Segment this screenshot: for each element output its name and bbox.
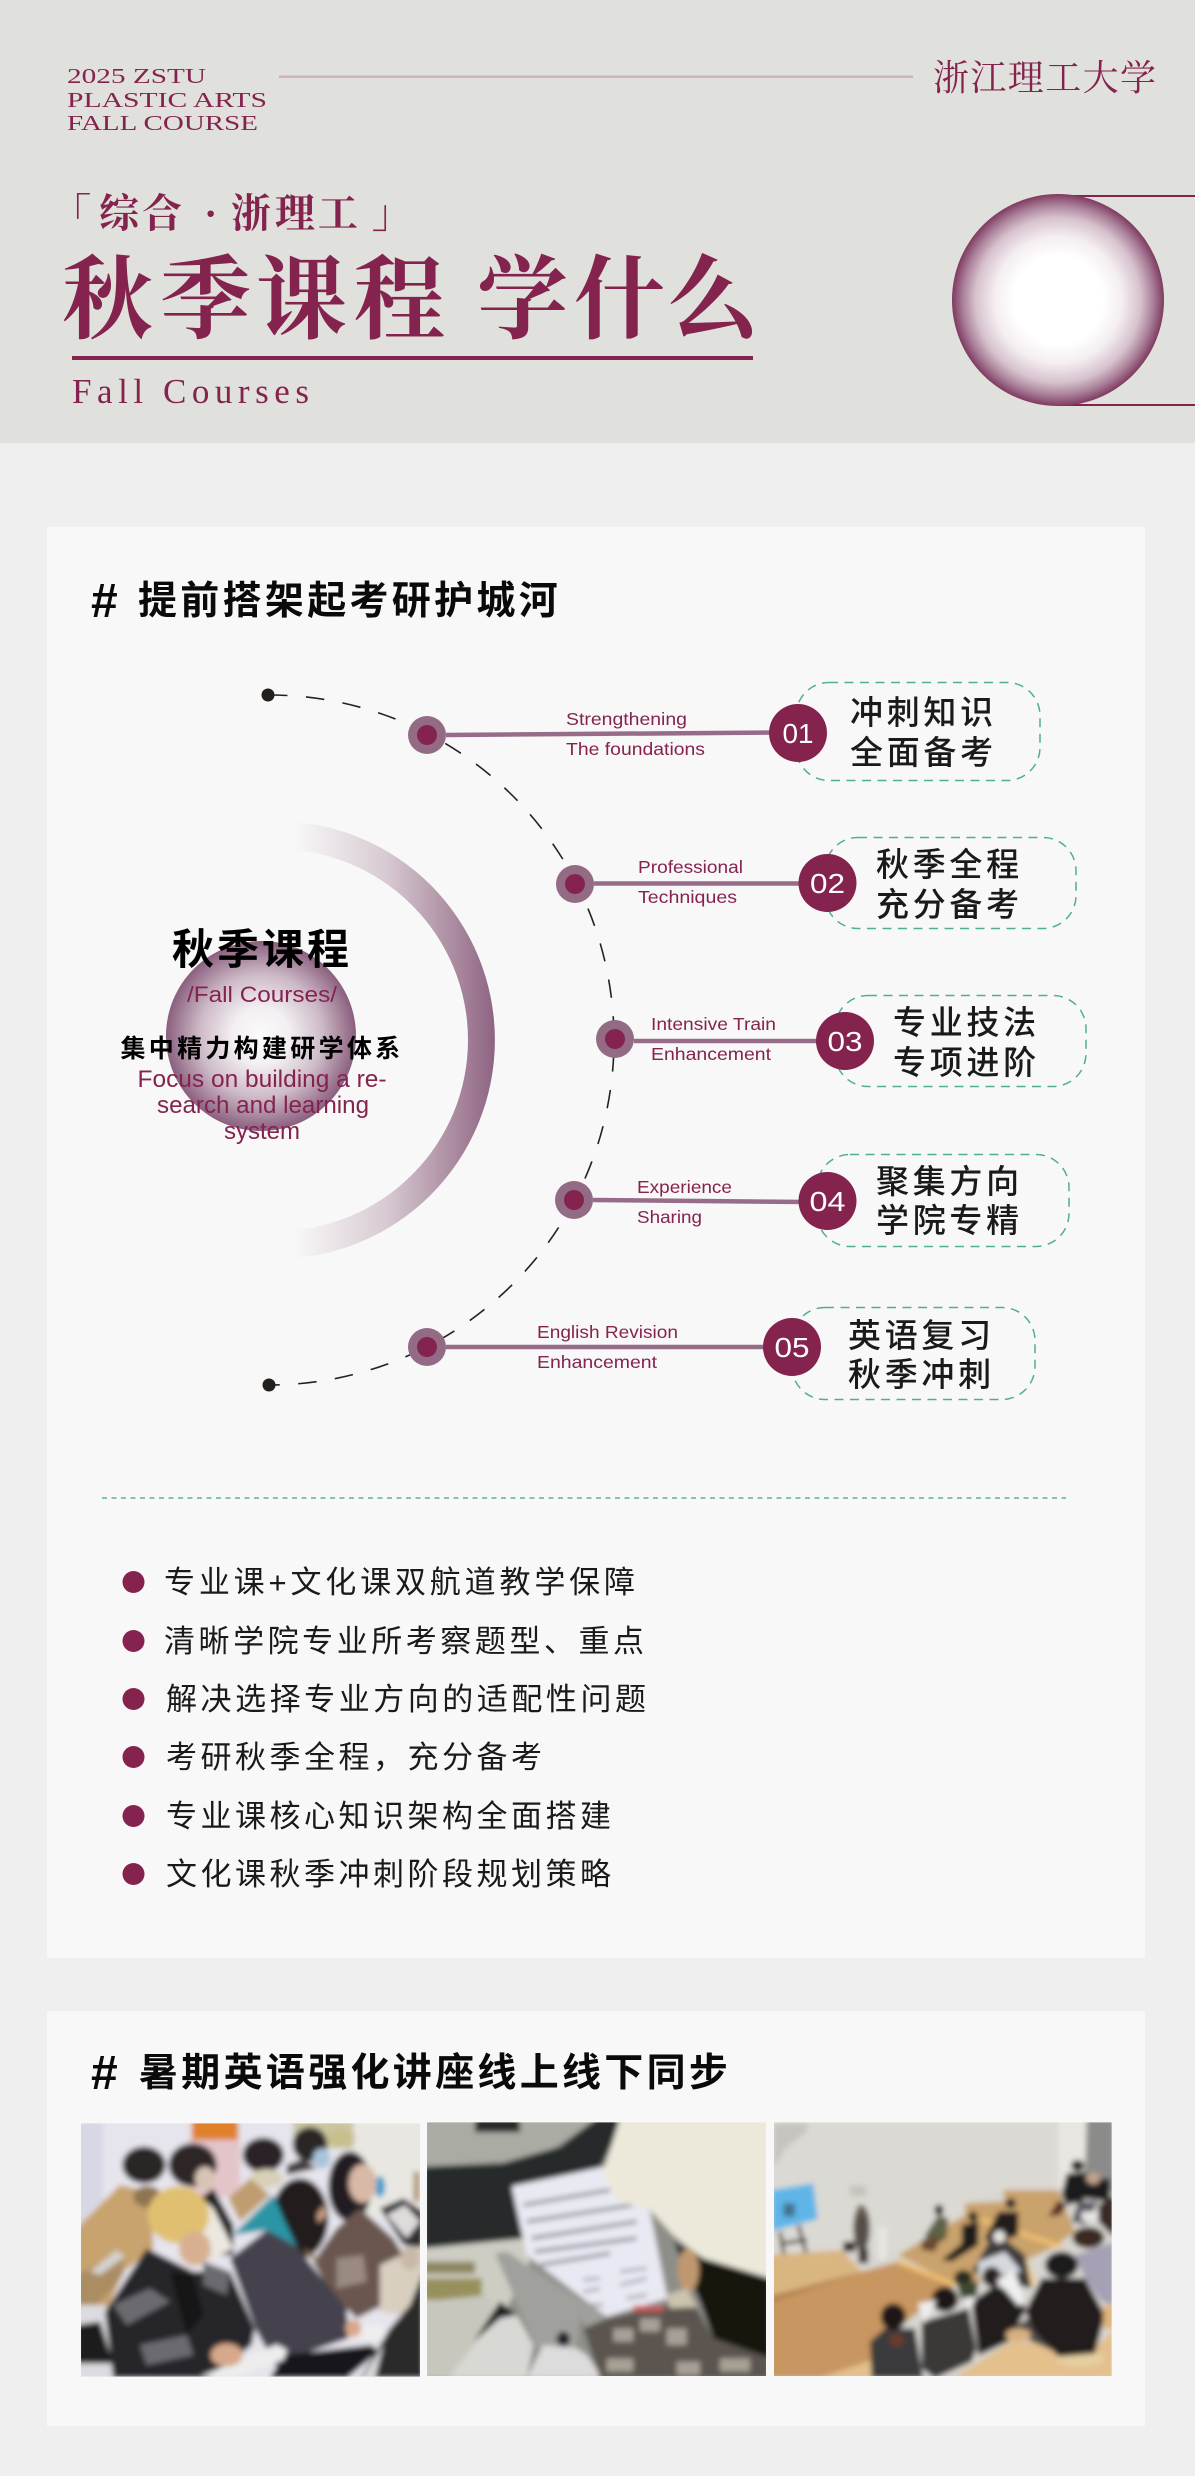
- item 3: Enhancement: [651, 1044, 771, 1064]
- item 4: [555, 1154, 1069, 1246]
- item 5: 英语复习: [848, 1317, 995, 1354]
- subtitle: 「综合·浙理工」: [51, 191, 412, 236]
- item 3: 专项进阶: [893, 1044, 1040, 1081]
- centre text: 秋季课程: [172, 926, 352, 973]
- item 1: The foundations: [566, 739, 705, 759]
- section heading: #: [91, 2047, 118, 2100]
- section heading: 提前搭架起考研护城河: [138, 580, 561, 623]
- bullet list: 专业课核心知识架构全面搭建: [166, 1799, 611, 1834]
- bullet list: 文化课秋季冲刺阶段规划策略: [166, 1857, 611, 1892]
- gradient half ring: [276, 821, 495, 1259]
- item 2: 充分备考: [876, 886, 1023, 923]
- english eyebrow text: 2025 ZSTU: [67, 64, 206, 88]
- header rule: [279, 76, 913, 78]
- item 4: 聚集方向: [876, 1163, 1023, 1200]
- main title: 秋季课程学什么: [62, 250, 763, 351]
- section heading: #: [91, 575, 118, 628]
- item 3: 03: [828, 1026, 862, 1057]
- item 4: 学院专精: [876, 1202, 1023, 1239]
- panel: English lectures: [47, 2011, 1145, 2426]
- item 3: [596, 996, 1086, 1086]
- item 1: 冲刺知识: [850, 694, 997, 731]
- english title: Fall Courses: [72, 372, 309, 411]
- gradient sphere with lines: [952, 194, 1195, 406]
- item 1: 01: [782, 718, 814, 749]
- item 3: Intensive Train: [651, 1014, 776, 1034]
- english eyebrow text: FALL COURSE: [67, 111, 258, 135]
- university name: 浙江理工大学: [933, 58, 1156, 98]
- item 5: 05: [774, 1332, 810, 1363]
- centre text: [120, 926, 404, 1145]
- centre text: search and learning: [157, 1092, 369, 1119]
- english eyebrow text: PLASTIC ARTS: [67, 88, 267, 112]
- arc end dots: [262, 688, 276, 1392]
- item 4: Sharing: [637, 1207, 702, 1227]
- item 2: 02: [810, 868, 845, 899]
- panel: course outline: [47, 527, 1145, 1958]
- item 5: 秋季冲刺: [848, 1356, 995, 1393]
- radial course diagram: [120, 682, 1086, 1400]
- item 4: Experience: [637, 1177, 732, 1197]
- item 1: [408, 682, 1040, 780]
- item 5: [408, 1308, 1035, 1400]
- centre text: 集中精力构建研学体系: [120, 1035, 404, 1063]
- item 1: Strengthening: [566, 709, 687, 729]
- photo: lecture room: [768, 2118, 1115, 2382]
- photo: students taking notes: [77, 2118, 427, 2382]
- item 2: Techniques: [638, 887, 737, 907]
- centre text: Focus on building a re-: [138, 1066, 386, 1093]
- title underline: [72, 356, 753, 360]
- item 4: 04: [810, 1186, 846, 1217]
- item 2: [556, 838, 1076, 928]
- header banner: [0, 0, 1195, 443]
- item 2: Professional: [638, 857, 743, 877]
- item 2: 秋季全程: [876, 846, 1023, 883]
- dashed arc: [269, 695, 614, 1385]
- centre text: /Fall Courses/: [187, 982, 338, 1007]
- gradient centre ball: [166, 941, 356, 1131]
- photo: reading handout: [423, 2118, 770, 2382]
- english eyebrow text: [67, 64, 267, 135]
- bullet list: 考研秋季全程，充分备考: [166, 1740, 542, 1775]
- bullet list: [122, 1565, 646, 1892]
- centre text: system: [224, 1118, 300, 1145]
- item 5: English Revision: [537, 1322, 678, 1342]
- item 3: 专业技法: [893, 1004, 1040, 1041]
- bullet list: 解决选择专业方向的适配性问题: [166, 1682, 646, 1717]
- bullet list: 专业课+文化课双航道教学保障: [164, 1565, 635, 1600]
- bullet list: 清晰学院专业所考察题型、重点: [164, 1624, 644, 1659]
- section heading: 暑期英语强化讲座线上线下同步: [139, 2052, 731, 2095]
- item 1: 全面备考: [850, 734, 997, 771]
- item 5: Enhancement: [537, 1352, 657, 1372]
